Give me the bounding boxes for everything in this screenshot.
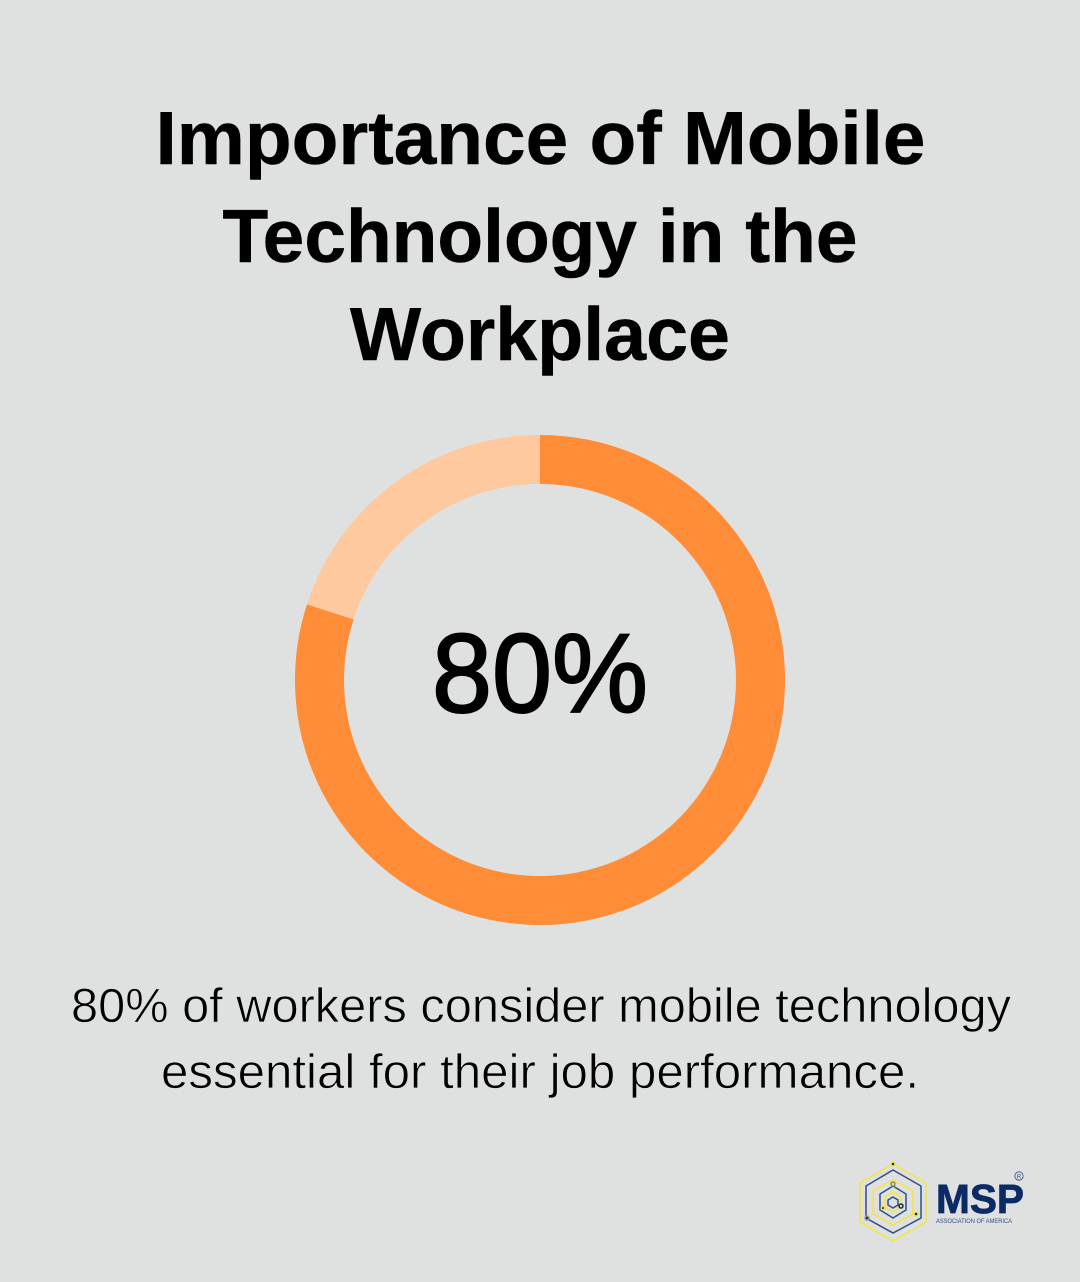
donut value: 80%: [432, 611, 648, 736]
registered mark: [1015, 1172, 1023, 1180]
registered mark: R: [1017, 1174, 1022, 1180]
description text: [71, 980, 1011, 1099]
description text: 80% of workers consider mobile technology: [71, 980, 1011, 1033]
ring segment: remaining 20 percent: [330, 460, 540, 612]
title: Technology in the: [222, 194, 858, 278]
logo: MSP Association of America: [860, 1162, 1024, 1241]
donut chart: 80 percent: [320, 460, 761, 901]
title: [156, 96, 926, 376]
title: Workplace: [350, 292, 730, 376]
logo icon: nested hexagons: [860, 1162, 926, 1241]
logo tagline: ASSOCIATION OF AMERICA: [936, 1219, 1012, 1225]
ring segment: 80 percent: [320, 460, 761, 901]
title: Importance of Mobile: [156, 96, 926, 180]
logo wordmark: MSP: [936, 1176, 1024, 1222]
description text: essential for their job performance.: [161, 1046, 919, 1099]
